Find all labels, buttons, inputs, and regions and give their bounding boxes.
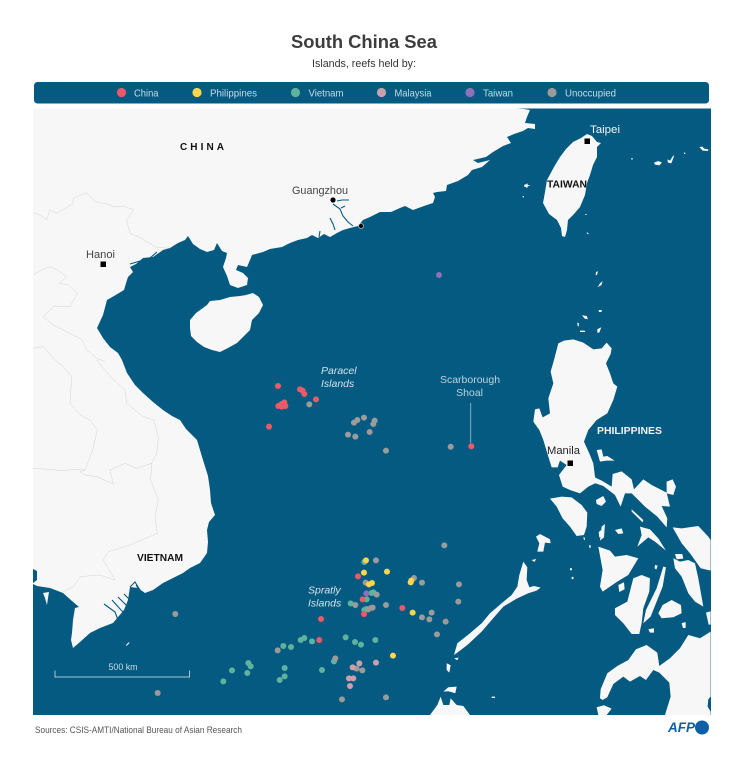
country borders bbox=[33, 193, 170, 592]
Malaysia-held Spratlys bbox=[346, 660, 379, 689]
dots: Spratly Islands bbox=[220, 542, 462, 702]
scale bar bbox=[55, 662, 190, 677]
land: Bicol bbox=[593, 471, 670, 527]
Taiwan-held Spratly bbox=[363, 590, 369, 596]
land: Calamian and Palawan islets bbox=[447, 534, 574, 673]
label: Paracel Islands: Paracel bbox=[321, 365, 357, 377]
label: PHILIPPINES: PHILIPPINES bbox=[597, 425, 662, 437]
land: Negros bbox=[615, 575, 650, 634]
marker: Manila bbox=[568, 460, 573, 466]
legend: Vietnam: Vietnam bbox=[308, 87, 344, 99]
land: island off the Mekong delta bbox=[126, 642, 130, 646]
Philippines-held Spratlys bbox=[361, 557, 416, 659]
label: Taipei: Taipei bbox=[590, 124, 620, 136]
land: small islands near Taiwan and Ryukyu bbox=[523, 147, 708, 333]
legend: China bbox=[117, 87, 159, 99]
China-held Spratlys bbox=[316, 573, 405, 643]
legend: Taiwan bbox=[465, 87, 513, 99]
dots: isolated unoccupied bbox=[155, 611, 178, 696]
label: Guangzhou: Guangzhou bbox=[292, 185, 348, 197]
unoccupied Paracels bbox=[306, 401, 389, 454]
China-held Paracels bbox=[266, 383, 319, 430]
label: Scarborough Shoal: Shoal bbox=[456, 387, 483, 399]
Scarborough Shoal leader line bbox=[470, 403, 472, 443]
land: Philippines bbox=[430, 339, 711, 715]
land: China and Vietnam mainland bbox=[33, 108, 535, 648]
land: Mindanao bbox=[600, 632, 711, 715]
dots: Scarborough Shoal bbox=[448, 443, 474, 450]
marker: Hanoi bbox=[100, 262, 106, 267]
land: Borneo tip bbox=[430, 687, 495, 715]
land: Luzon bbox=[533, 339, 617, 493]
land: Mindoro bbox=[550, 497, 587, 536]
Vietnam-held Spratlys bbox=[220, 559, 378, 684]
label: TAIWAN: TAIWAN bbox=[547, 178, 587, 190]
land: Romblon and Tablas bbox=[599, 524, 623, 541]
marker: Guangzhou bbox=[330, 197, 336, 203]
label: Hanoi: Hanoi bbox=[86, 249, 115, 261]
legend: China: China bbox=[134, 87, 159, 99]
land: Hainan bbox=[190, 293, 263, 352]
water: river deltas bbox=[104, 200, 353, 620]
unoccupied Spratlys bbox=[275, 542, 462, 702]
label: Spratly Islands: Spratly bbox=[308, 584, 341, 596]
legend: Malaysia: Malaysia bbox=[394, 87, 432, 99]
label: Manila: Manila bbox=[547, 445, 581, 457]
label: Scarborough Shoal: Scarborough bbox=[440, 374, 500, 386]
marker: Taipei bbox=[584, 138, 590, 144]
AFP logo: AFP bbox=[667, 719, 696, 735]
land: Samar bbox=[673, 526, 711, 571]
label: Paracel Islands: Islands bbox=[321, 378, 355, 390]
land: Taiwan bbox=[543, 134, 601, 237]
label: CHINA: CHINA bbox=[180, 142, 224, 153]
land: Marinduque and Polillo bbox=[596, 449, 615, 506]
land: Panay bbox=[598, 547, 638, 592]
legend: Malaysia bbox=[377, 87, 432, 99]
map panel bbox=[33, 108, 711, 715]
title: South China Sea bbox=[291, 31, 438, 52]
label: Spratly Islands: Islands bbox=[308, 598, 342, 610]
land: Bohol bbox=[658, 600, 682, 618]
source note: Sources: CSIS-AMTI/National Bureau of Asian Research bbox=[35, 725, 242, 736]
land: Palawan bbox=[454, 562, 541, 655]
dots: Paracel Islands bbox=[266, 383, 389, 454]
land: Siquijor and others bbox=[648, 611, 711, 633]
legend bar bbox=[34, 82, 709, 104]
subtitle: Islands, reefs held by: bbox=[312, 58, 416, 70]
legend: Vietnam bbox=[291, 87, 344, 99]
legend: Unoccupied: Unoccupied bbox=[565, 87, 616, 99]
land: Catanduanes bbox=[667, 479, 676, 495]
land: Guimaras and small Visayas bbox=[618, 565, 658, 592]
land: Leyte bbox=[673, 554, 703, 607]
legend: Philippines bbox=[192, 87, 257, 99]
AFP logo bbox=[667, 719, 709, 735]
water: Gulf of Thailand inlet bbox=[33, 569, 37, 583]
land: Phu Quoc island bbox=[43, 592, 49, 605]
land: Masbate bbox=[632, 509, 666, 551]
legend: Philippines: Philippines bbox=[210, 87, 257, 99]
land: Cebu bbox=[643, 567, 666, 623]
legend: Taiwan: Taiwan bbox=[483, 87, 513, 99]
dot: Taiwan-held Pratas bbox=[436, 272, 442, 278]
label: VIETNAM: VIETNAM bbox=[137, 552, 183, 564]
scale bar: 500 km bbox=[108, 662, 138, 673]
marker: Hong Kong bbox=[358, 224, 364, 228]
